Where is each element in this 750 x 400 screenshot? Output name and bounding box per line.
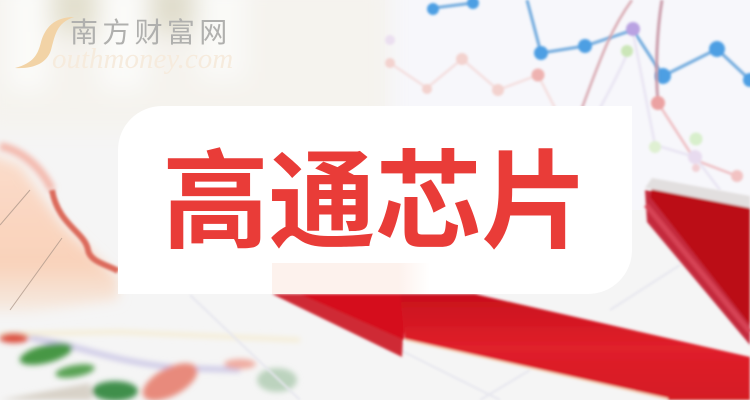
red arrow head [645,178,750,345]
red arrow shaft [272,294,750,400]
left orange chart area [0,146,118,312]
logo swoosh [15,17,74,68]
blue line chart [427,0,750,87]
logo chinese name: 南方财富网 [70,17,232,48]
lower-left blurred chart [0,332,300,400]
logo: southmoney [15,17,233,75]
title panel [118,106,632,294]
logo domain: outhmoney.com [52,43,233,75]
title: 高通芯片 [162,142,588,262]
pink line chart [385,0,743,190]
panel tint band [272,263,430,294]
